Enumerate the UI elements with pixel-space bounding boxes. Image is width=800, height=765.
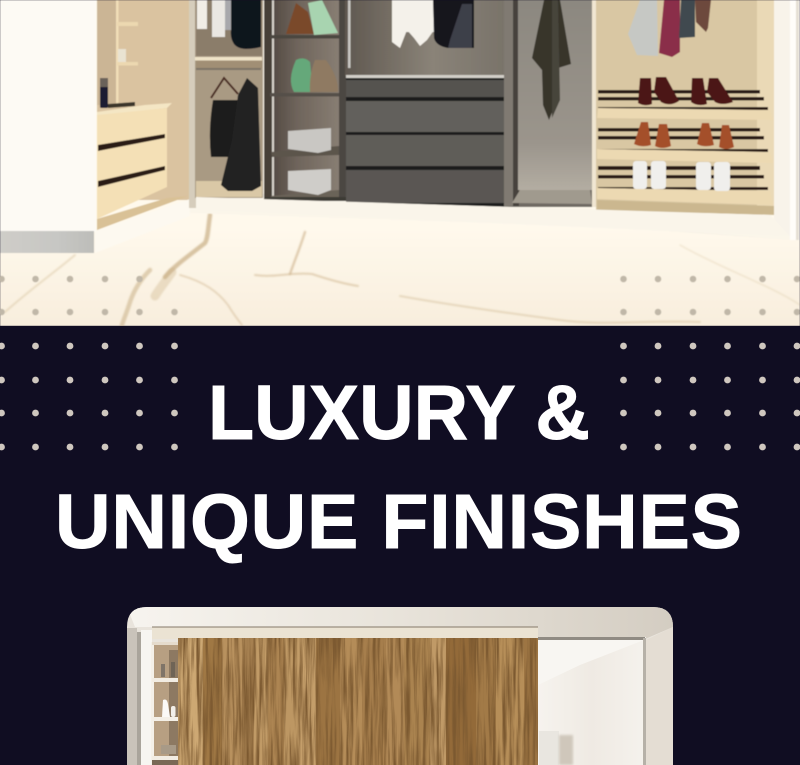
right shoe rack section <box>596 0 776 215</box>
white plinth <box>95 199 190 253</box>
handbags on top shelf <box>286 3 314 34</box>
tan sandals <box>634 122 734 149</box>
white sneakers <box>633 161 730 191</box>
title: LUXURY & <box>208 370 590 456</box>
hanging garments <box>628 0 658 56</box>
left wall <box>127 628 137 765</box>
wood header <box>152 627 538 639</box>
right white frame <box>774 0 790 236</box>
dots over photo <box>0 276 800 315</box>
dot grid: right <box>620 343 800 450</box>
title <box>55 370 742 565</box>
hanging section <box>195 0 263 198</box>
bookcase niche <box>151 642 178 765</box>
ceiling band <box>127 607 673 639</box>
white wall <box>0 0 96 232</box>
bottom photo: wood sliding wardrobe <box>127 607 673 765</box>
right wall <box>646 627 673 765</box>
dark background panel <box>0 326 800 765</box>
white storage boxes <box>288 128 331 153</box>
narrow hanging bay with scarf <box>504 0 596 207</box>
shelf three <box>598 166 760 170</box>
wood panel <box>178 638 538 765</box>
shelf one <box>598 90 760 94</box>
dark open shelf unit <box>264 0 346 201</box>
top photo: walk-in wardrobe <box>0 0 800 326</box>
grey drawers <box>346 75 505 207</box>
dot grid: left <box>0 343 178 450</box>
left niche with vanity <box>97 0 193 230</box>
title: UNIQUE FINISHES <box>55 479 742 565</box>
upper centre with clothes <box>345 0 505 76</box>
shelf two <box>598 128 760 132</box>
right opening <box>538 637 646 765</box>
maroon boots <box>638 77 733 105</box>
marble floor veins <box>5 215 800 325</box>
